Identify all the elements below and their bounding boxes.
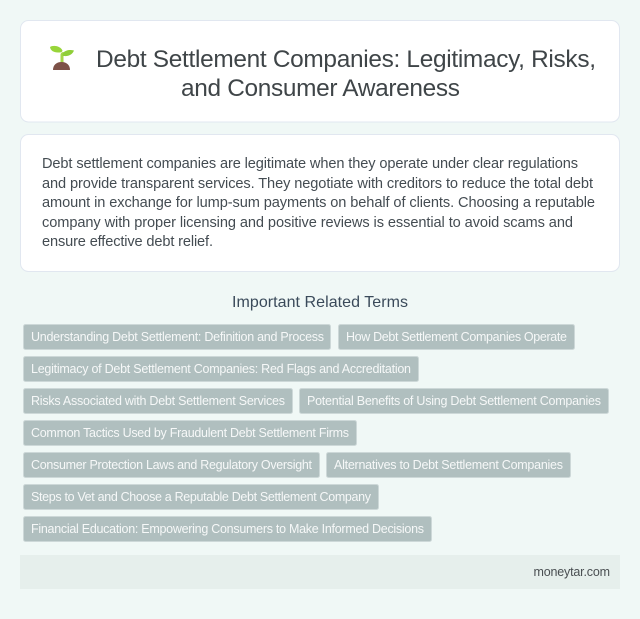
tag: how companies operate: How Debt Settlement Companies Operate [346, 330, 567, 344]
panel: summary text [20, 134, 620, 272]
tag: financial education: Financial Education: Empowering Consumers to Make Informed Decisions [31, 522, 424, 536]
tag: legitimacy: Legitimacy of Debt Settlement Companies: Red Flags and Accreditation [31, 362, 411, 376]
tag: understanding debt settlement: Understanding Debt Settlement: Definition and Process [31, 330, 324, 344]
title: Debt Settlement Companies: Legitimacy, Risks, [96, 46, 596, 73]
tag: understanding debt settlement [24, 324, 330, 350]
tag: alternatives [326, 452, 570, 478]
panel: summary text: and provide transparent services. They negotiate with creditors to reduce the total debt [42, 176, 593, 192]
tag: alternatives: Alternatives to Debt Settlement Companies [334, 458, 563, 472]
tag: financial education [24, 516, 432, 542]
panel: summary text: company with proper licensing and positive reviews is essential to avoid scams and [42, 215, 573, 231]
tag: potential benefits [300, 388, 608, 414]
panel: summary text: ensure effective debt relief. [42, 234, 213, 250]
heading: related terms: Important Related Terms [232, 294, 408, 311]
tag: consumer protection: Consumer Protection Laws and Regulatory Oversight [31, 458, 313, 472]
tag: common tactics: Common Tactics Used by Fraudulent Debt Settlement Firms [31, 426, 349, 440]
tag: steps to vet: Steps to Vet and Choose a Reputable Debt Settlement Company [31, 490, 372, 504]
tag: how companies operate [338, 324, 574, 350]
panel: related term tags [24, 324, 608, 542]
panel: summary text: Debt settlement companies are legitimate when they operate under clear regulations [42, 156, 578, 172]
tag: legitimacy [24, 356, 418, 382]
tag: consumer protection [24, 452, 320, 478]
tag: risks [24, 388, 292, 414]
title [96, 46, 596, 102]
title: and Consumer Awareness [181, 75, 460, 102]
tag: steps to vet [24, 484, 378, 510]
tag: risks: Risks Associated with Debt Settlement Services [31, 394, 285, 408]
icon: seedling [50, 46, 74, 70]
footer: moneytar.com [534, 565, 610, 579]
footer [20, 555, 620, 589]
panel: summary text: amount in exchange for lump-sum payments on behalf of clients. Choosing a reputable [42, 195, 595, 211]
tag: common tactics [24, 420, 356, 446]
panel: title card [20, 20, 620, 122]
tag: potential benefits: Potential Benefits of Using Debt Settlement Companies [307, 394, 601, 408]
